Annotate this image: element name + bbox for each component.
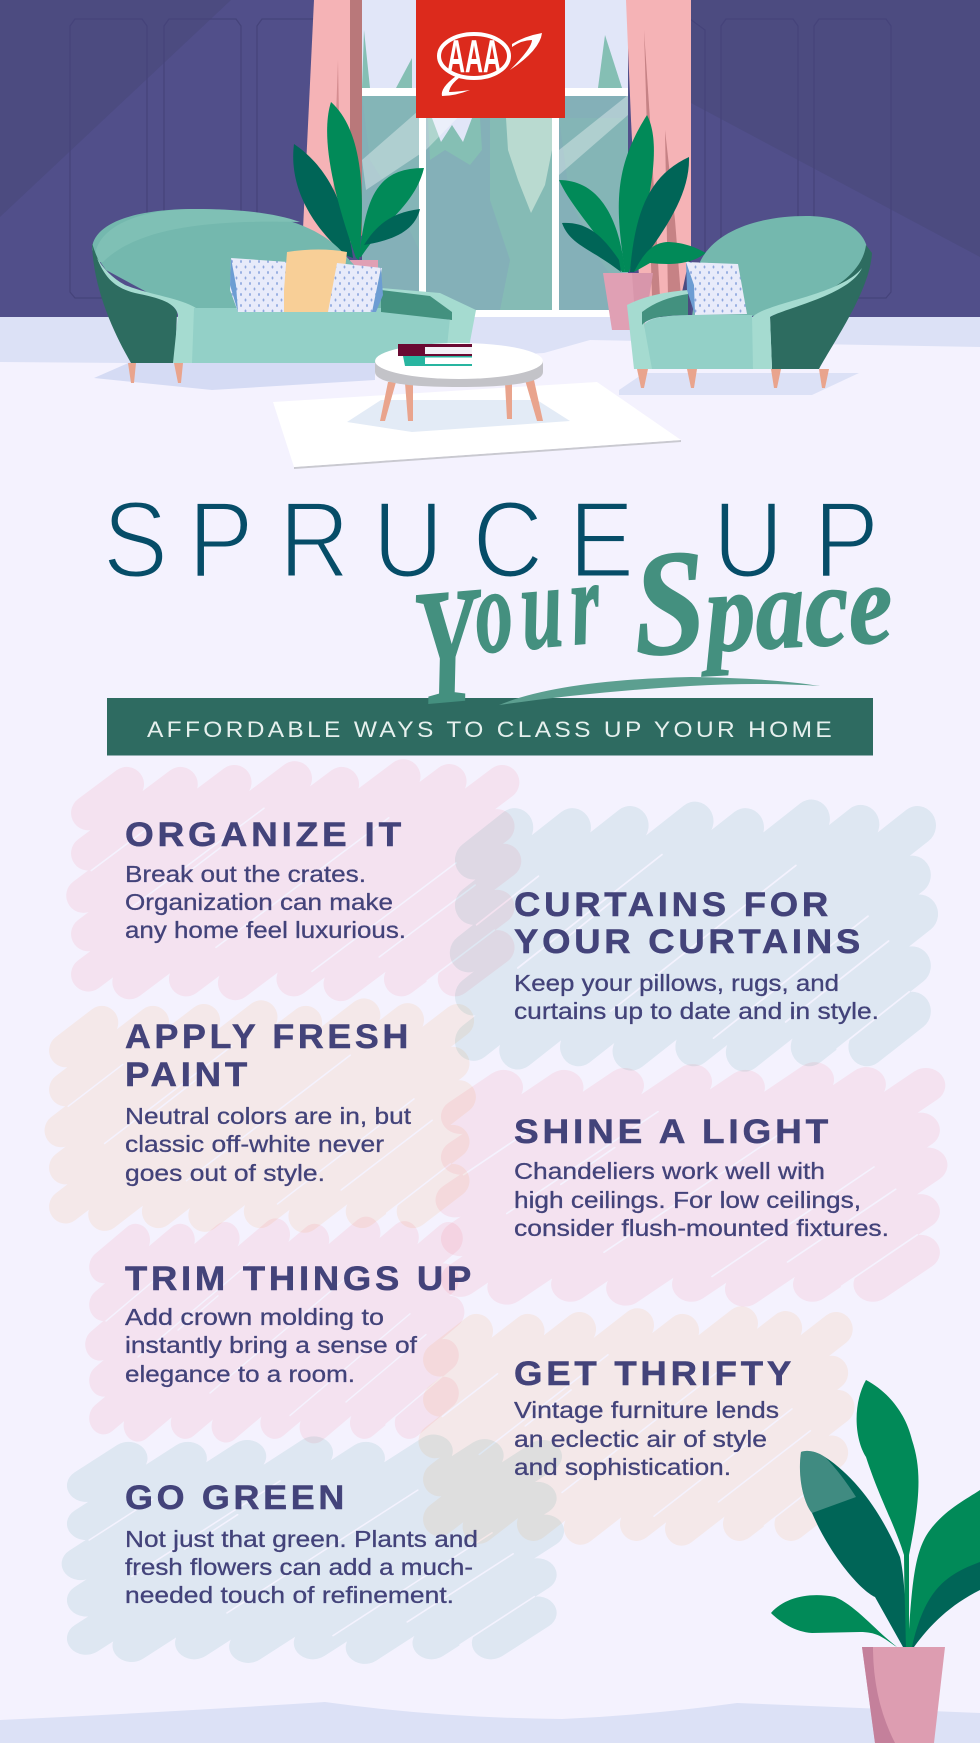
armchair (619, 216, 872, 395)
text block: get thrifty: GET THRIFTY (514, 1355, 795, 1393)
text block: organize it: any home feel luxurious. (125, 917, 406, 943)
text block: go green: GO GREEN (125, 1479, 348, 1517)
title script: your space (407, 509, 896, 740)
leaves (619, 115, 654, 272)
title: spruce up: SPRUCE UP (103, 478, 879, 600)
lower left leaf (771, 1595, 897, 1647)
chair dark side (770, 245, 872, 369)
text block: get thrifty: an eclectic air of style (514, 1426, 767, 1452)
text block: curtains for your curtains: YOUR CURTAINS (514, 923, 864, 961)
sofa (92, 209, 476, 390)
sofa trim (97, 258, 196, 363)
window (362, 0, 628, 317)
left curtain (302, 0, 362, 250)
chair cushion (686, 262, 747, 315)
sofa arm dark side (92, 243, 177, 363)
banner with AAA logo (416, 0, 565, 118)
text block: go green (125, 1479, 478, 1608)
text block: go green: fresh flowers can add a much- (125, 1554, 473, 1580)
text block: shine a light: Chandeliers work well with (514, 1158, 825, 1184)
right cushion (328, 263, 382, 312)
chair legs (637, 369, 829, 388)
subtitle banner (107, 698, 873, 756)
text block: shine a light: high ceilings. For low ceilings, (514, 1187, 861, 1213)
plant pot (862, 1647, 945, 1743)
scribble: go green (81, 1451, 545, 1647)
table side (375, 361, 543, 387)
floor band (0, 317, 980, 363)
scribble: curtains (468, 819, 920, 1052)
tall leaf (857, 1380, 918, 1647)
text block: trim things up: instantly bring a sense of (125, 1332, 418, 1358)
title script: your space: Y (407, 552, 494, 740)
leaves (293, 144, 353, 258)
bottom-right plant (771, 1380, 980, 1743)
back wall (0, 0, 980, 317)
text block: apply fresh paint: PAINT (125, 1056, 251, 1094)
title script: your space: our (469, 535, 614, 679)
text block: get thrifty: and sophistication. (514, 1454, 731, 1480)
text block: apply fresh paint: goes out of style. (125, 1160, 325, 1186)
chair back (690, 216, 868, 330)
right leaf (908, 1490, 980, 1647)
text block: shine a light (514, 1113, 889, 1241)
scribble: thrifty (435, 1323, 838, 1529)
plant pot (603, 273, 653, 330)
chair trim (749, 268, 862, 369)
text block: curtains for your curtains: Keep your pillows, rugs, and (514, 970, 839, 996)
table top (375, 343, 543, 379)
banner with AAA logo: AAA (447, 30, 501, 82)
text block: organize it: ORGANIZE IT (125, 816, 405, 854)
sofa back (92, 209, 395, 310)
bottom floor band (0, 1702, 980, 1743)
text block: organize it (125, 816, 406, 943)
panel: room illustration (0, 0, 980, 469)
scribble: trim (100, 1233, 450, 1427)
coffee table (375, 343, 543, 421)
plant pot (350, 260, 378, 272)
text block: curtains for your curtains: CURTAINS FOR (514, 886, 832, 924)
text block: get thrifty (514, 1355, 795, 1480)
text block: shine a light: consider flush-mounted fixtures. (514, 1215, 889, 1241)
text block: apply fresh paint: Neutral colors are in, but (125, 1103, 412, 1129)
sofa right arm (381, 288, 476, 347)
text block: shine a light: SHINE A LIGHT (514, 1113, 832, 1151)
text block: curtains for your curtains (514, 886, 879, 1024)
right curtain (626, 0, 691, 297)
text block: curtains for your curtains: curtains up to date and in style. (514, 998, 879, 1024)
sofa legs (128, 363, 183, 383)
scribble: paint (61, 1015, 459, 1216)
text block: get thrifty: Vintage furniture lends (514, 1397, 779, 1423)
text block: trim things up: TRIM THINGS UP (125, 1260, 475, 1298)
right dark leaf (912, 1562, 980, 1647)
chair left arm (627, 290, 688, 369)
sofa seat (192, 308, 450, 363)
text block: go green: needed touch of refinement. (125, 1582, 454, 1608)
text block: trim things up (125, 1260, 475, 1387)
chair shadow (619, 373, 859, 395)
table legs (380, 380, 543, 421)
left plant (293, 102, 424, 272)
right plant (559, 115, 706, 330)
text block: apply fresh paint: classic off-white never (125, 1131, 384, 1157)
text block: apply fresh paint (125, 1018, 412, 1186)
left cushion (230, 258, 290, 312)
scribble: organize it (84, 777, 504, 984)
text block: trim things up: Add crown molding to (125, 1304, 384, 1330)
text block: go green: Not just that green. Plants and (125, 1526, 478, 1552)
rug (273, 382, 681, 469)
middle cushion (284, 250, 347, 312)
scribble: shine a light (455, 1080, 928, 1289)
sofa shadow (94, 360, 375, 390)
books (398, 344, 472, 366)
chair seat (644, 315, 753, 369)
text block: trim things up: elegance to a room. (125, 1361, 355, 1387)
text block: organize it: Break out the crates. (125, 861, 366, 887)
text block: organize it: Organization can make (125, 889, 393, 915)
title script: your space: Space (629, 509, 896, 688)
brush swash (499, 677, 820, 705)
subtitle banner: AFFORDABLE WAYS TO CLASS UP YOUR HOME (147, 717, 835, 742)
left dark leaf (800, 1451, 906, 1647)
text block: apply fresh paint: APPLY FRESH (125, 1018, 412, 1056)
